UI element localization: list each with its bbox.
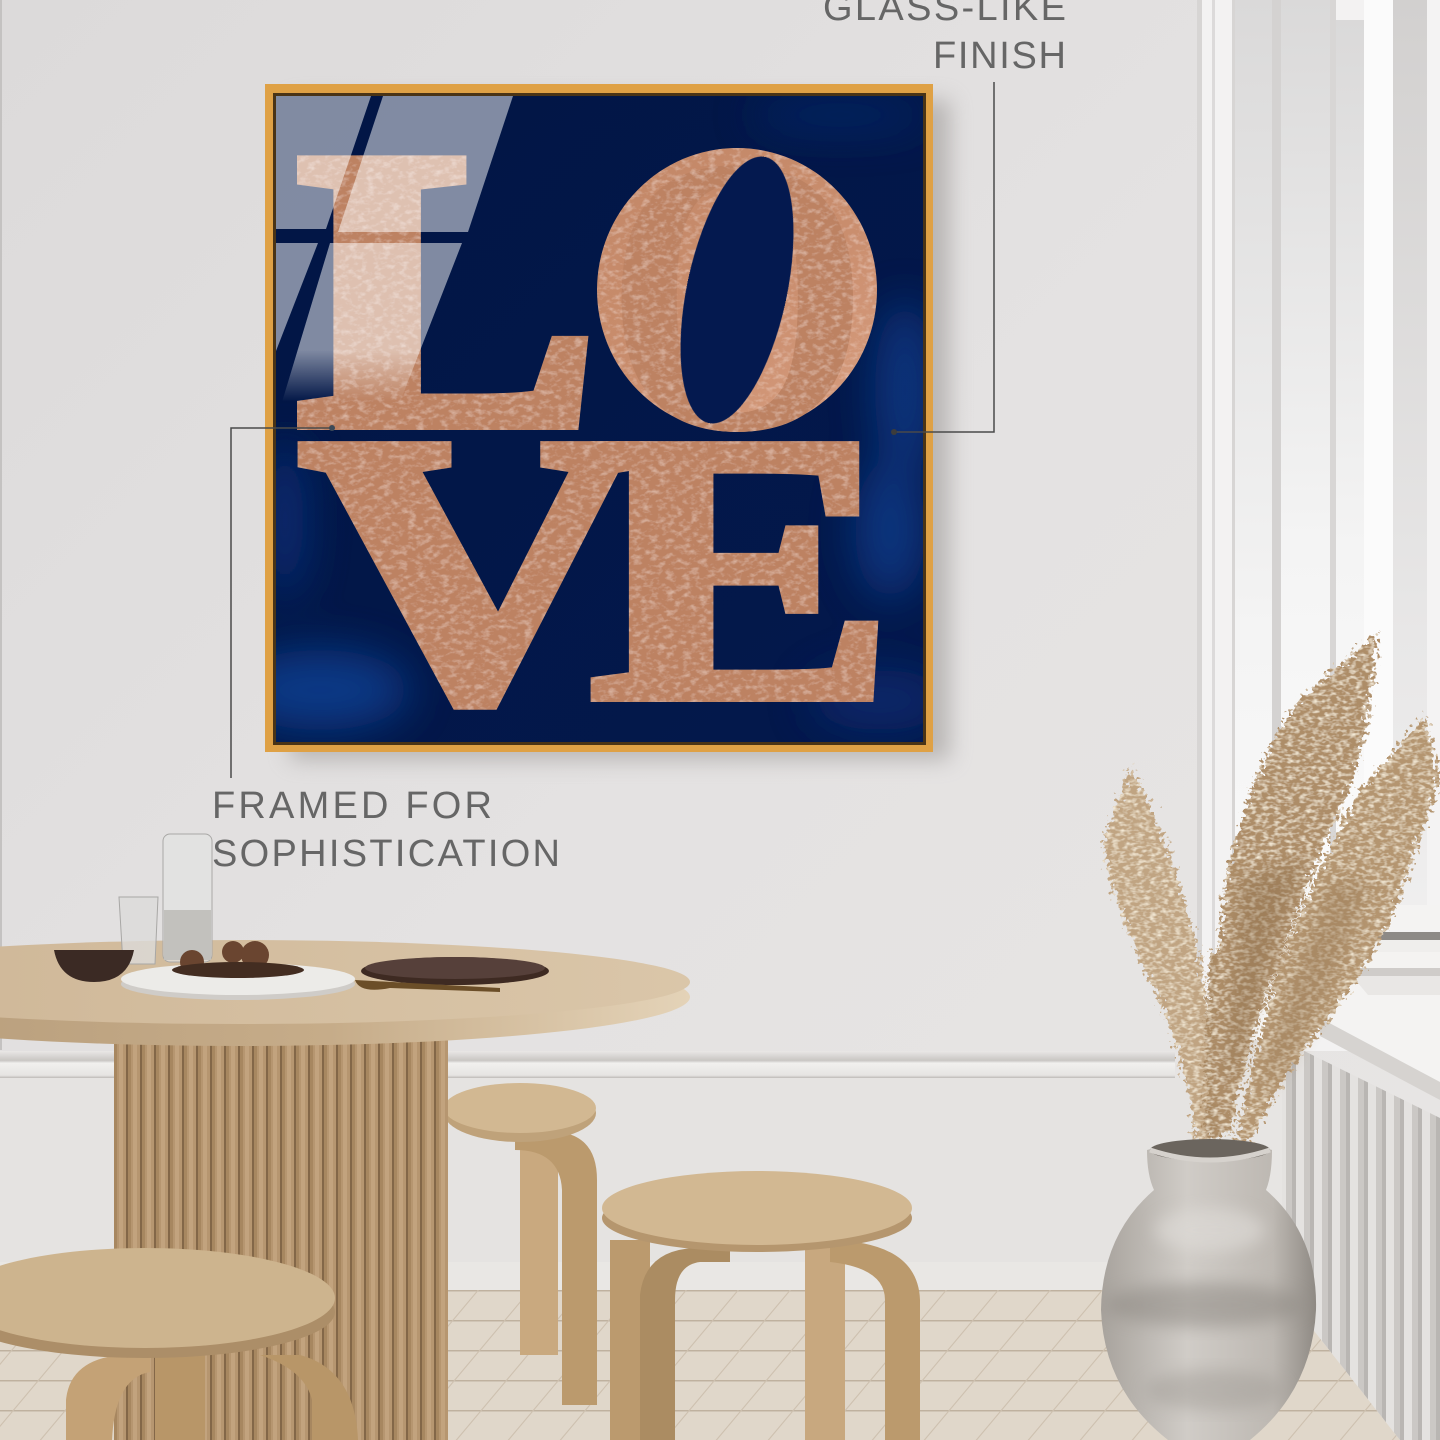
front right stool [602,1171,920,1440]
pampas grass [1104,633,1440,1150]
gold frame [265,84,933,752]
glass reflection [276,96,513,402]
plume shading [1224,860,1370,1100]
table base fluted [114,1030,448,1440]
letter L: L [297,70,597,508]
front left stool [0,1248,358,1440]
spoon [355,980,500,992]
chocolates [172,941,304,978]
LOVE lettering [297,70,894,780]
vase rim opening [1150,1139,1270,1161]
callout: framed for sophistication: FRAMED FOR [212,785,492,827]
radiator [1282,1040,1440,1440]
callout: framed for sophistication: SOPHISTICATION [212,833,560,875]
plume: small centre [1205,950,1222,1140]
callout: framed for sophistication [212,425,560,875]
ceramic vase [1101,1139,1316,1440]
table top [0,940,690,1046]
wood plate [361,957,549,985]
window frame and moulding [1197,0,1440,1290]
dark bowl [54,950,134,982]
drinking glass [119,897,158,964]
letter O: O [605,75,870,514]
vase mottling [1105,1208,1305,1410]
plume: left [1104,768,1209,1150]
navy canvas [276,96,923,742]
plume: right [1236,715,1440,1142]
framed artwork [230,70,950,780]
window sill and books [1285,905,1440,1100]
watercolor blotches [230,101,950,730]
frame shadow [290,100,950,760]
letter E: E [590,357,894,778]
marble plate [121,963,355,1000]
lower wall panel and dado rail [0,1051,1200,1290]
O counter [660,147,814,433]
callout: glass-like finish: FINISH [933,35,1066,77]
back stool [444,1083,597,1405]
letter V: V [301,359,647,780]
tabletop objects [54,834,549,1000]
plume: middle [1211,633,1377,1135]
callout: glass-like finish [823,0,1066,435]
glass carafe [163,834,212,962]
floor [0,1290,1400,1440]
